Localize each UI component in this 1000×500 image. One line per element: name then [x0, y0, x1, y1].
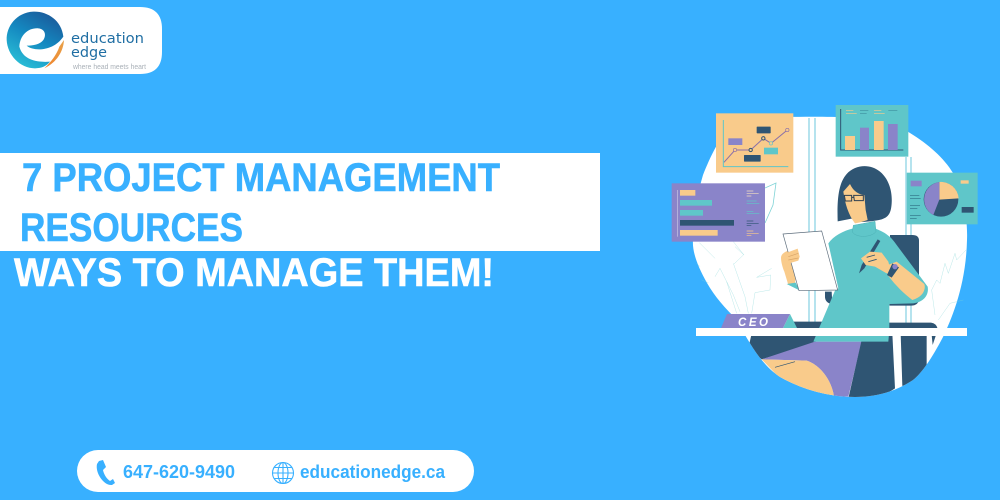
face [843, 184, 868, 223]
logo badge: edge [71, 45, 107, 61]
CEO nameplate: CEO [738, 317, 768, 329]
icon: globe [272, 462, 294, 484]
torso and sleeve [813, 228, 928, 342]
collar [852, 221, 876, 236]
phone number: 647-620-9490 [123, 462, 235, 482]
chart panel: flow line [716, 113, 793, 173]
background window lines and plants [697, 118, 966, 328]
logo wordmark: education [71, 31, 144, 47]
website: educationedge.ca [300, 462, 446, 482]
subtitle: WAYS TO MANAGE THEM! [14, 251, 494, 295]
hair [838, 166, 892, 222]
icon: phone [97, 460, 115, 485]
legs under desk [748, 333, 936, 399]
watch [887, 263, 899, 278]
CEO nameplate [721, 314, 797, 329]
left arm [781, 248, 798, 285]
desk [696, 328, 967, 336]
forearm [885, 262, 925, 300]
chart panel: horizontal bars [672, 183, 765, 242]
glasses [844, 195, 863, 201]
pen [859, 239, 880, 273]
fingers [785, 249, 800, 263]
paper [783, 231, 838, 291]
logo badge [0, 7, 162, 74]
title text line 2: RESOURCES [20, 206, 243, 250]
woman [781, 166, 938, 342]
white blob background [693, 117, 967, 397]
illustration: CEO with project charts [672, 105, 978, 399]
chair back [825, 235, 919, 306]
icon: education edge swirl [7, 12, 64, 68]
title text line 1: 7 PROJECT MANAGEMENT [22, 156, 500, 200]
right hand [861, 252, 890, 273]
chart panel: pie chart [907, 173, 978, 224]
contact pill [77, 450, 474, 492]
chair seat [868, 323, 938, 329]
chart panel: bar chart [836, 105, 908, 157]
title banner [0, 153, 600, 251]
logo tagline: where head meets heart [72, 64, 146, 71]
